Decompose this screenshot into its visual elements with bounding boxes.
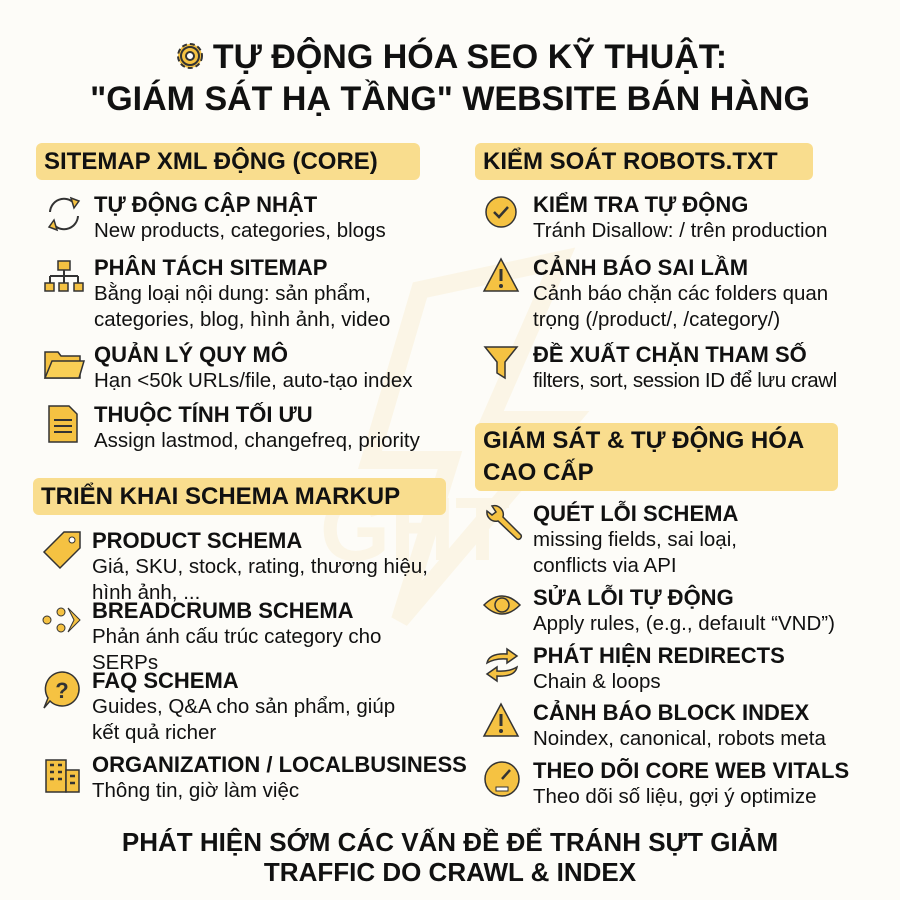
panel: sitemap items: New products, categories, blogs [94,219,386,242]
item: cảnh báo sai lầm [482,255,828,331]
panel: giám sát items: conflicts via API [533,554,677,577]
panel: robots items: trọng (/product/, /category/) [533,308,780,331]
panel: schema items: PRODUCT SCHEMA [92,528,302,553]
panel: sitemap items: categories, blog, hình ảnh, video [94,308,390,331]
panel: sitemap items: THUỘC TÍNH TỐI ƯU [94,402,313,427]
panel: giám sát items [482,500,849,808]
footer: PHÁT HIỆN SỚM CÁC VẤN ĐỀ ĐỂ TRÁNH SỰT GIẢM [122,827,778,857]
panel: schema items: kết quả richer [92,721,216,744]
item: tự động cập nhật [48,192,386,242]
panel: robots items: Tránh Disallow: / trên production [533,219,827,242]
item: organization [45,752,467,802]
panel: sitemap items: Hạn <50k URLs/file, auto-tạo index [94,369,413,392]
panel: schema items [42,528,467,802]
panel: giám sát items: PHÁT HIỆN REDIRECTS [533,643,785,668]
panel: robots items: ĐỀ XUẤT CHẶN THAM SỐ [533,342,807,367]
panel: giám sát items: THEO DÕI CORE WEB VITALS [533,758,849,783]
panel: schema items: hình ảnh, ... [92,581,200,604]
panel: schema items: ? [55,678,69,703]
footer [122,827,778,887]
footer: TRAFFIC DO CRAWL & INDEX [264,857,636,887]
panel: sitemap items: PHÂN TÁCH SITEMAP [94,255,327,280]
panel: giám sát items: Apply rules, (e.g., defaıult “VND”) [533,612,835,635]
panel: schema items: Thông tin, giờ làm việc [92,779,299,802]
panel: giám sát items: Chain & loops [533,670,661,693]
heading: giám sát: CAO CẤP [483,459,594,486]
panel: sitemap items: Bằng loại nội dung: sản phẩm, [94,282,371,305]
panel: giám sát items: QUÉT LỖI SCHEMA [533,501,738,526]
panel: giám sát items: missing fields, sai loại, [533,528,737,551]
panel: robots items [482,192,837,392]
panel: giám sát items: Theo dõi số liệu, gợi ý optimize [533,785,816,808]
heading: giám sát [475,423,838,491]
item: quản lý quy mô [44,342,413,392]
title: "GIÁM SÁT HẠ TẦNG" WEBSITE BÁN HÀNG [90,80,810,118]
panel: robots items: Cảnh báo chặn các folders quan [533,282,828,305]
panel: giám sát items: SỬA LỖI TỰ ĐỘNG [533,585,734,610]
panel: sitemap items: TỰ ĐỘNG CẬP NHẬT [94,192,317,217]
item: phân tách sitemap [44,255,390,331]
heading: sitemap [36,143,420,180]
panel: sitemap items [44,192,420,452]
title: TỰ ĐỘNG HÓA SEO KỸ THUẬT: [213,38,727,76]
panel: schema items: SERPs [92,651,158,674]
panel: schema items: ORGANIZATION / LOCALBUSINESS [92,752,467,777]
item: block index [482,700,826,750]
title [90,37,810,118]
panel: robots items: CẢNH BÁO SAI LẦM [533,255,748,280]
item: kiểm tra tự động [485,192,827,242]
watermark: GHT [320,480,510,580]
item: breadcrumb [42,598,381,674]
panel: sitemap items: Assign lastmod, changefreq, priority [94,429,420,452]
item: quét lỗi [486,500,738,577]
item: core web vitals [484,758,849,808]
panel: giám sát items: Noindex, canonical, robots meta [533,727,826,750]
panel: schema items: FAQ SCHEMA [92,668,239,693]
item: thuộc tính tối ưu [48,402,420,452]
item: đề xuất chặn [484,342,837,392]
item: product schema [43,528,428,604]
heading: sitemap: SITEMAP XML ĐỘNG (CORE) [44,148,378,175]
heading: schema: TRIỂN KHAI SCHEMA MARKUP [41,483,400,510]
heading: robots [475,143,813,180]
panel: robots items: filters, sort, session ID để lưu crawl [533,369,837,392]
item: sửa lỗi [483,584,835,635]
panel: sitemap items: QUẢN LÝ QUY MÔ [94,342,288,367]
item: redirects [486,643,785,693]
panel: schema items: BREADCRUMB SCHEMA [92,598,354,623]
item: faq [43,668,395,744]
heading: robots: KIỂM SOÁT ROBOTS.TXT [483,148,778,175]
panel: robots items: KIỂM TRA TỰ ĐỘNG [533,192,748,217]
heading: schema [33,478,446,515]
icon: gear [177,43,203,69]
watermark [320,248,589,626]
panel: schema items: Guides, Q&A cho sản phẩm, giúp [92,695,395,718]
panel: schema items: Giá, SKU, stock, rating, thương hiệu, [92,555,428,578]
panel: giám sát items: CẢNH BÁO BLOCK INDEX [533,700,809,725]
heading: giám sát: GIÁM SÁT & TỰ ĐỘNG HÓA [483,427,804,454]
panel: schema items: Phản ánh cấu trúc category cho [92,625,381,648]
